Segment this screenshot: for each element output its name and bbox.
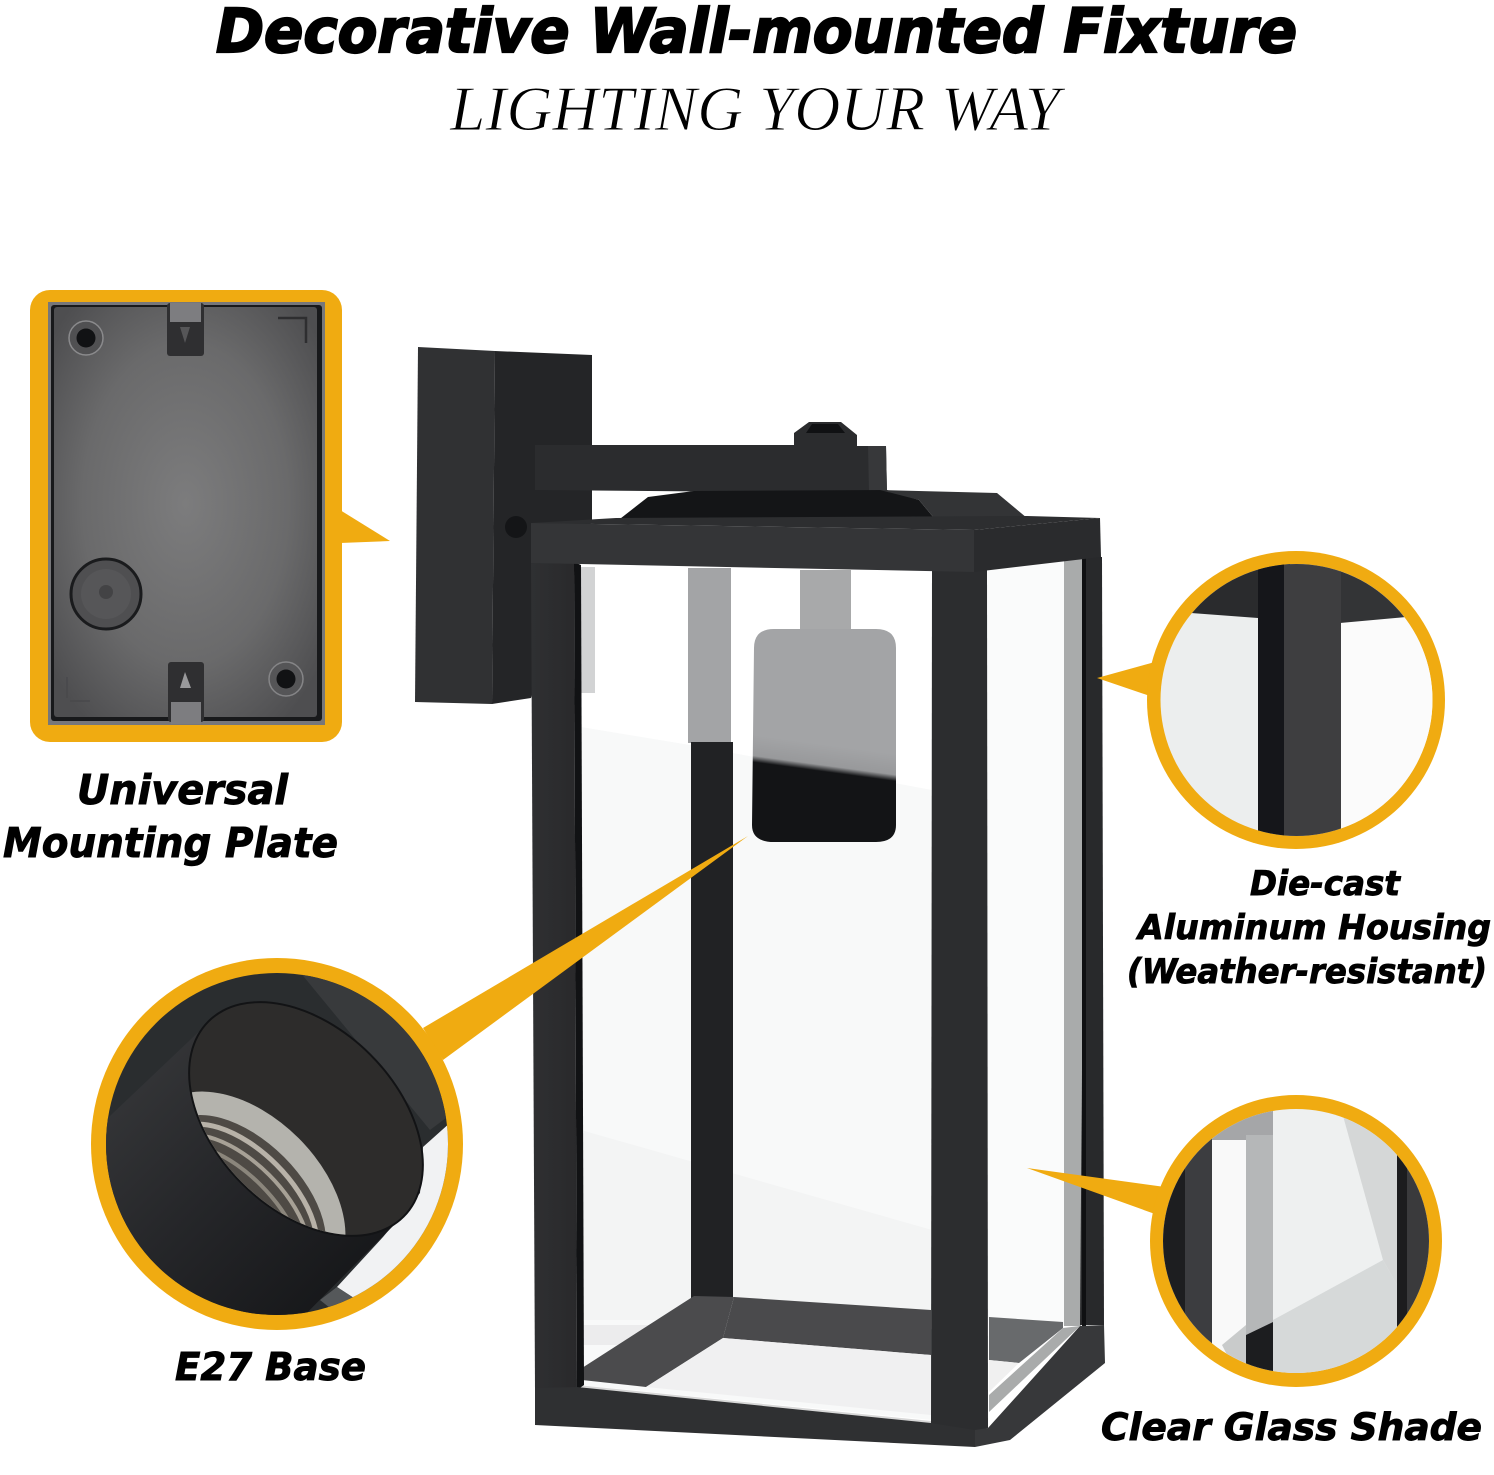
label: universal mounting plate: [3, 766, 338, 867]
right posts: [1397, 1155, 1407, 1327]
label: universal mounting plate: Mounting Plate: [3, 819, 338, 867]
front glass: [575, 565, 935, 1425]
pointer: glass: [1027, 1168, 1165, 1214]
background: [302, 974, 446, 1130]
left posts: [1163, 1168, 1185, 1314]
label: housing: [1127, 864, 1491, 992]
top notch: [167, 303, 204, 356]
glass panes: [1341, 572, 1432, 828]
label: universal mounting plate: Universal: [77, 766, 289, 814]
screw hole bottom: [269, 662, 303, 696]
ceramic ring and thread: [192, 1092, 346, 1235]
pointer: housing: [1097, 662, 1155, 696]
subtitle: LIGHTING YOUR WAY: [449, 74, 1066, 144]
panel: E27 base callout: [90, 956, 470, 1335]
post: [1258, 560, 1284, 840]
left post: [531, 560, 577, 1390]
rim and inner wall: [188, 1001, 424, 1236]
ring: [1147, 551, 1445, 849]
right pane: [1344, 1118, 1397, 1284]
knockout: [71, 559, 141, 629]
pointer: E27 base: [423, 836, 748, 1060]
frame: [30, 290, 342, 742]
panel: lamp fixture: [415, 347, 1105, 1447]
ring: [1150, 1095, 1442, 1387]
grey strip: [1246, 1135, 1273, 1380]
top band: [1209, 1111, 1273, 1141]
bottom notch: [168, 662, 204, 724]
pointer: mounting plate: [340, 510, 390, 543]
label: housing: Die-cast: [1250, 864, 1402, 904]
label: clear glass shade: Clear Glass Shade: [1101, 1406, 1482, 1449]
top frame: [531, 518, 1101, 572]
label: housing: Aluminum Housing: [1135, 908, 1491, 948]
panel: universal mounting plate: [30, 290, 342, 742]
frame top: [1192, 564, 1290, 618]
corner marks: [67, 318, 306, 701]
backplate: [415, 347, 592, 704]
side glass: [987, 554, 1104, 1412]
ring: [91, 958, 463, 1330]
panel: housing callout: [1147, 551, 1445, 849]
right post: [931, 570, 988, 1432]
back frame seen through glass: [577, 567, 931, 1425]
mounting arm: [535, 422, 887, 493]
label: E27 base: E27 Base: [175, 1345, 366, 1389]
white strip: [1212, 1140, 1246, 1380]
panel: glass shade callout: [1150, 1095, 1442, 1387]
base: [535, 1325, 1105, 1447]
lantern roof: [505, 490, 1100, 538]
cylinder body: [106, 1033, 394, 1315]
socket: [752, 570, 896, 842]
screw hole top: [69, 321, 103, 355]
